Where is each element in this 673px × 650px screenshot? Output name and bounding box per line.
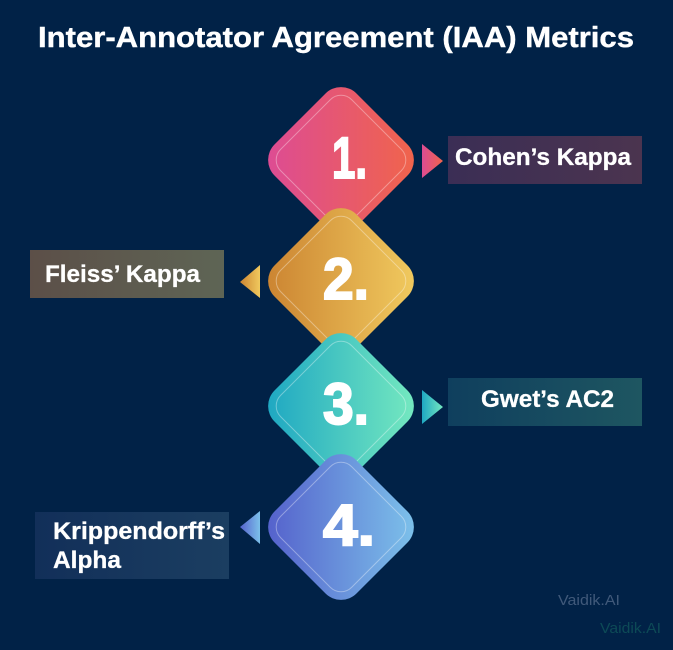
diamond badge 1: 1. [332,126,367,191]
arrow: right pointer 1 [422,144,443,178]
watermark: green: Vaidik.AI [600,620,661,637]
label: Krippendorff's Alpha: Krippendorff’s [53,518,225,545]
arrow: right pointer 3 [422,390,443,424]
label: Gwet's AC2: Gwet’s AC2 [481,386,614,413]
diamond badge 3: 3. [323,372,369,437]
diamond badge 3 [268,333,414,479]
item 2: Fleiss' Kappa [30,208,414,354]
item 3: Gwet's AC2 [268,333,642,479]
arrow: left pointer 2 [240,265,260,298]
label: Cohen's Kappa [448,136,642,184]
label: Fleiss' Kappa [30,250,224,298]
diamond badge 4: 4. [323,493,375,558]
diamond badge 4 [268,454,414,600]
title: Inter-Annotator Agreement (IAA) Metrics [38,22,634,54]
label: Krippendorff's Alpha: Alpha [53,547,122,574]
label: Gwet's AC2 [448,378,642,426]
label: Fleiss' Kappa: Fleiss’ Kappa [45,261,201,288]
item 4: Krippendorff's Alpha [35,454,414,600]
item 1: Cohen's Kappa [268,87,642,233]
diamond badge 1 [268,87,414,233]
diamond badge 2: 2. [323,247,369,312]
watermark: grey: Vaidik.AI [558,592,620,609]
label: Cohen's Kappa: Cohen’s Kappa [455,144,632,171]
diamond badge 2 [268,208,414,354]
label: Krippendorff's Alpha [35,512,229,579]
arrow: left pointer 4 [240,511,260,544]
